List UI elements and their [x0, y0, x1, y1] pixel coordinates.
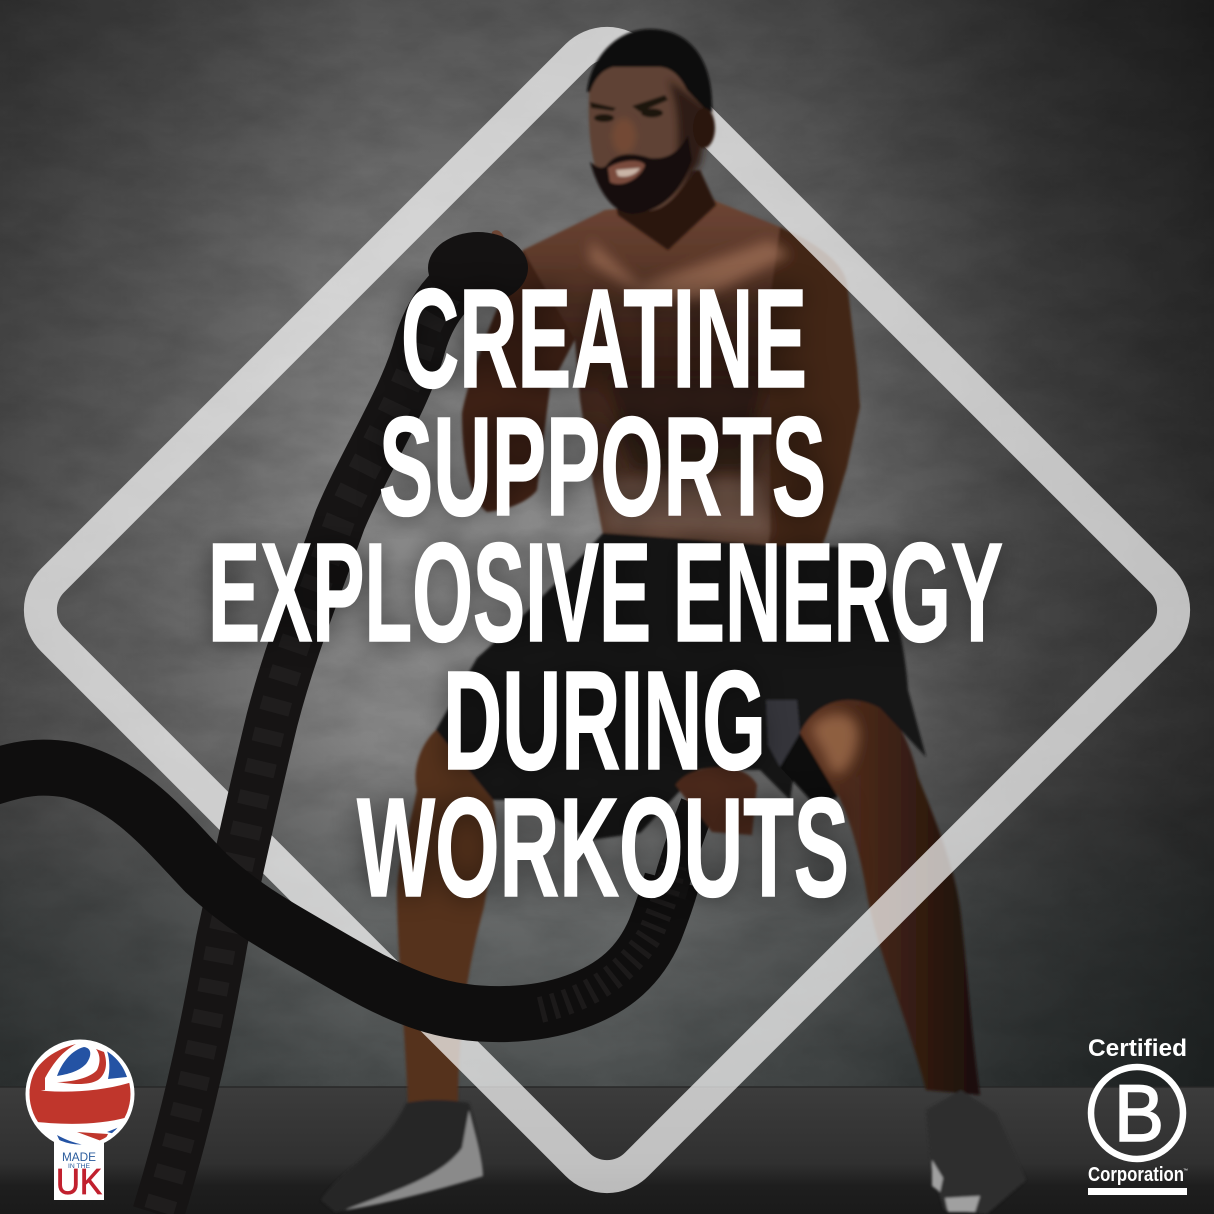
abdomen: [600, 480, 770, 535]
headline shadow: DURING: [443, 641, 766, 799]
man: body and legs: [321, 200, 1026, 1214]
badge: certified B corporation: B: [1114, 1069, 1164, 1159]
face: [589, 50, 708, 211]
right shoe sole: [932, 1160, 980, 1212]
headline: SUPPORTS: [379, 387, 826, 545]
headline shadow: [208, 259, 1003, 926]
knee highlight: [812, 714, 858, 774]
headline: [208, 259, 1003, 926]
badge: certified B corporation: Certified: [1088, 1035, 1187, 1062]
man: head: [587, 29, 716, 250]
hand on rope: [675, 767, 757, 835]
mouth: [608, 161, 645, 184]
fist gripping rope: [428, 230, 528, 304]
headline: WORKOUTS: [357, 768, 849, 926]
right shoe: [926, 1090, 1026, 1214]
headline shadow: WORKOUTS: [357, 768, 849, 926]
hair: [587, 29, 712, 112]
neck: [612, 170, 716, 250]
badge: certified B corporation: ™: [1183, 1168, 1188, 1174]
shorts right shadow: [780, 733, 838, 805]
brows and eyes: [590, 95, 668, 112]
ribs shadow: [610, 380, 760, 470]
headline shadow: SUPPORTS: [379, 387, 826, 545]
left shoe: [321, 1100, 482, 1212]
headline shadow: CREATINE: [401, 259, 807, 417]
right leg: [800, 698, 980, 1095]
badge: certified B corporation: [1088, 1035, 1188, 1195]
battle rope: vertical strand: [158, 270, 478, 1214]
beard: [590, 135, 692, 214]
right arm: [705, 227, 860, 770]
badge text: UK: UK: [56, 1161, 102, 1202]
shorts grey fabric: [766, 700, 800, 767]
left shoe heel and sole: [345, 1110, 483, 1210]
face shadow: [668, 80, 710, 195]
left leg: [397, 730, 496, 1105]
badge: made in the UK: IN THE: [68, 1163, 91, 1170]
shorts: [436, 533, 926, 840]
headline: DURING: [443, 641, 766, 799]
raised arm: [462, 250, 580, 512]
torso: [523, 200, 847, 545]
ear: [693, 108, 715, 148]
chest highlights: [590, 240, 790, 300]
badge: certified B corporation: Corporation: [1088, 1164, 1184, 1186]
battle rope: foreground sweep: [0, 768, 698, 1014]
nose highlight: [612, 118, 636, 154]
badge text: made in the: MADE: [62, 1152, 96, 1164]
headline: CREATINE: [401, 259, 807, 417]
badge: made in the UK: [26, 1040, 134, 1202]
